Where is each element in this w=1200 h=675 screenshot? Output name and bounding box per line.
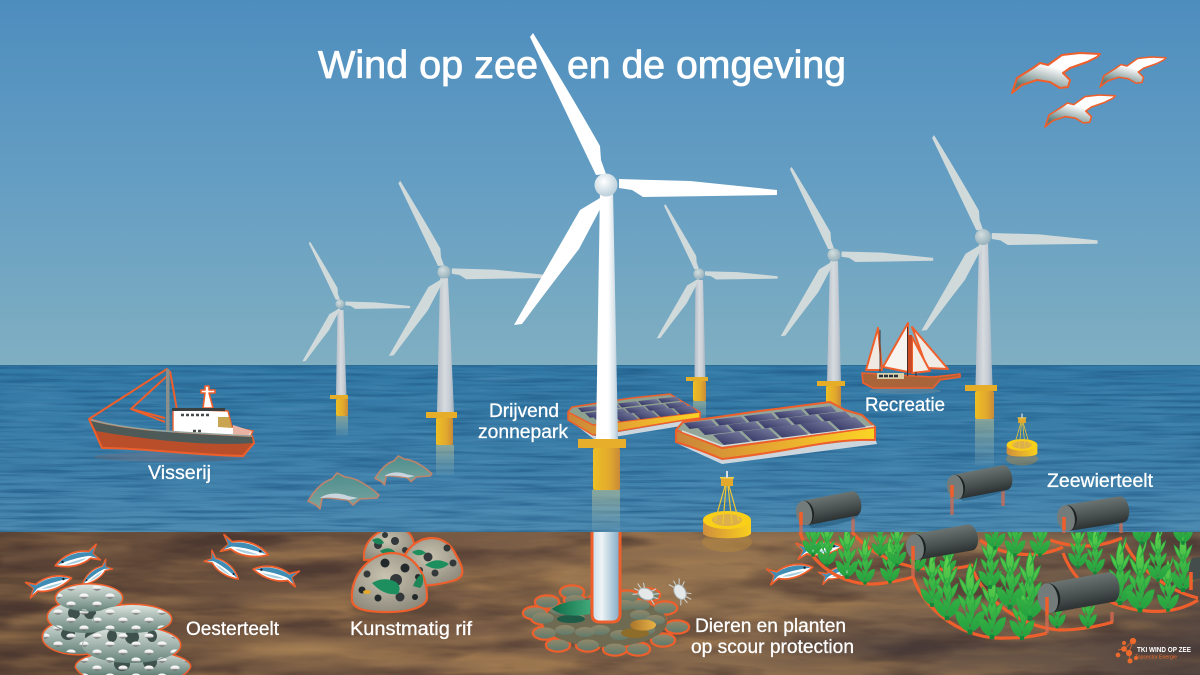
panel: floating solar park large: [676, 402, 877, 464]
seaweed farm: [794, 464, 1200, 640]
logo network icon: [1116, 638, 1138, 663]
icon: small buoy: [1006, 414, 1038, 465]
turbine 3: [657, 204, 778, 421]
kelp plants: [802, 532, 1194, 640]
label: Recreatie: Recreatie: [865, 394, 945, 416]
floating cylinders: [794, 464, 1200, 615]
logo: TKI Wind op Zee: Topsector Energie: [1135, 654, 1177, 660]
turbine 2: [389, 181, 547, 475]
turbine 5: [921, 135, 1098, 465]
sky background: [0, 0, 1200, 366]
turbine 4: [781, 167, 933, 416]
label: Kunstmatig rif: Kunstmatig rif: [350, 618, 473, 640]
title: [318, 44, 846, 87]
rope starts: [801, 485, 1191, 615]
reef dome back: [364, 528, 414, 560]
icon: oyster racks: [43, 584, 190, 675]
icon: green shell: [552, 600, 590, 623]
reef dome front: [352, 553, 427, 612]
title: en de omgeving: [567, 44, 846, 87]
reef dome right: [403, 538, 462, 586]
panel: floating solar park small: [568, 394, 700, 440]
label: Dieren en planten op scour protection: [691, 615, 854, 658]
icon: dolphins: [308, 456, 432, 509]
label: Zeewierteelt: Zeewierteelt: [1047, 470, 1154, 492]
label: Dieren en planten op scour protection: op scour protection: [691, 636, 854, 658]
icon: dolphin large: [308, 473, 379, 509]
icon: crab left: [632, 580, 662, 605]
title: Wind op zee: [318, 44, 538, 87]
label: Drijvend zonnepark: Drijvend: [489, 400, 559, 422]
icon: gold shell: [621, 620, 656, 638]
cylinder shadows in water: [800, 480, 1128, 533]
orange growing lines: [800, 532, 1198, 638]
submerged ropes: [801, 490, 1121, 533]
seabed with sand: [0, 532, 1200, 675]
icon: artificial reef: [350, 528, 462, 616]
sea surface: [0, 365, 1200, 533]
main turbine: [514, 33, 777, 622]
icon: seagull large: [1012, 53, 1100, 93]
label: Drijvend zonnepark: [478, 400, 568, 443]
icon: large buoy: [702, 471, 752, 552]
icon: dolphin small: [375, 456, 432, 485]
label: Dieren en planten op scour protection: Dieren en planten: [695, 615, 846, 637]
scour protection stones: [524, 586, 688, 654]
icon: sailing boat: [862, 323, 960, 394]
icon: seagull lower: [1045, 95, 1115, 127]
label: Visserij: Visserij: [148, 462, 211, 484]
icon: fish schools: [26, 535, 857, 598]
logo: TKI Wind op Zee: TKI WIND OP ZEE: [1137, 645, 1191, 654]
turbine 1 (far left): [302, 242, 410, 436]
underwater tower: [592, 532, 620, 622]
icon: crab right: [668, 576, 694, 606]
icon: seagull right: [1100, 57, 1166, 87]
logo: TKI Wind op Zee: [1116, 638, 1191, 663]
icon: fishing boat: [89, 369, 254, 462]
label: Oesterteelt: Oesterteelt: [186, 618, 280, 640]
label: Drijvend zonnepark: zonnepark: [478, 421, 568, 443]
